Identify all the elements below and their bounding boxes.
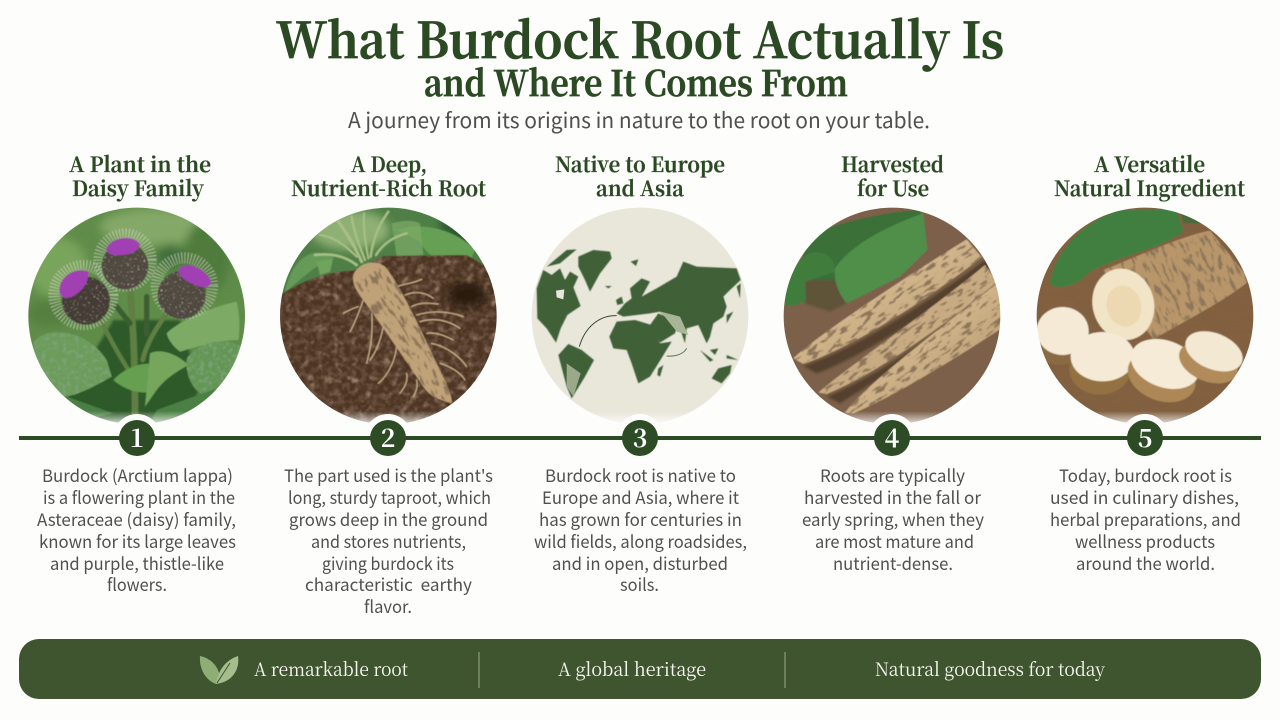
text: step 2: giving burdock its <box>322 550 454 575</box>
text: step 2: grows deep in the ground <box>289 506 488 531</box>
image: harvested roots <box>784 208 1000 423</box>
text: step 1: flowers. <box>107 571 167 596</box>
heading 1 <box>69 149 211 203</box>
heading 4 <box>841 149 944 203</box>
text: step 3: wild fields, along roadsides, <box>534 528 747 553</box>
sub heading: and Where It Comes From <box>424 57 848 107</box>
circle bottom fades <box>20 411 1260 462</box>
stems <box>100 283 168 413</box>
badge 1 <box>119 419 155 456</box>
text: step 1 <box>37 462 236 596</box>
rootlets <box>343 279 467 397</box>
banner text 3: Natural goodness for today <box>875 656 1106 682</box>
text: step 3: has grown for centuries in <box>539 506 742 531</box>
badge 5: 5 <box>1138 419 1152 455</box>
dark undergrowth <box>67 320 200 423</box>
root <box>352 262 453 404</box>
stems <box>315 212 407 265</box>
text: step 1: is a flowering plant in the <box>43 484 235 509</box>
heading 2: A Deep, <box>351 149 427 179</box>
heading 5: A Versatile <box>1094 149 1205 179</box>
title <box>276 3 1004 135</box>
text: step 4 <box>802 462 984 575</box>
text: step 4: harvested in the fall or <box>804 484 981 509</box>
image: world map <box>530 207 750 423</box>
text: step 1: and purple, thistle-like <box>50 550 224 575</box>
root cylinder <box>1104 230 1248 339</box>
text: step 5 <box>1050 462 1241 575</box>
heading 3 <box>555 149 725 203</box>
badge 1: 1 <box>130 419 144 455</box>
map highlights <box>567 363 581 397</box>
heading 4: Harvested <box>841 149 944 179</box>
heading 3: and Asia <box>596 173 685 203</box>
heading 3: Native to Europe <box>555 149 725 179</box>
text: step 2: The part used is the plant's <box>284 462 493 487</box>
text: step 3: Burdock root is native to <box>545 462 736 487</box>
image: taproot in soil <box>280 208 497 423</box>
banner text 2: A global heritage <box>558 656 706 682</box>
heading 1: Daisy Family <box>72 173 205 203</box>
leaves <box>33 332 112 397</box>
banner text 1: A remarkable root <box>254 656 408 682</box>
image: sliced root <box>1036 208 1254 423</box>
badge 4: 4 <box>885 419 900 455</box>
text: step 3 <box>534 462 747 596</box>
text: step 1: Asteraceae (daisy) family, <box>37 506 236 531</box>
root shadows <box>803 260 1003 403</box>
leaf <box>782 208 843 277</box>
badge 3: 3 <box>633 419 647 455</box>
text: step 4: early spring, when they <box>802 506 984 531</box>
text: step 2: long, sturdy taproot, which <box>288 484 491 509</box>
leaf <box>1050 209 1183 287</box>
badge 2 <box>370 419 406 456</box>
text: step 5: around the world. <box>1076 550 1215 575</box>
tagline: A journey from its origins in nature to the root on your table. <box>348 104 930 135</box>
heading 4: for Use <box>857 173 929 203</box>
cut face <box>1092 268 1155 341</box>
text: step 5: used in culinary dishes, <box>1050 484 1239 509</box>
text: step 4: are most mature and <box>815 528 974 553</box>
text: step 1: known for its large leaves <box>39 528 236 553</box>
text: step 5: Today, burdock root is <box>1059 462 1232 487</box>
continents <box>537 249 741 398</box>
text: step 2 <box>284 462 493 618</box>
main heading: What Burdock Root Actually Is <box>276 3 1004 73</box>
text: step 4: Roots are typically <box>820 462 965 487</box>
text: step 3: and in open, disturbed <box>552 550 728 575</box>
text: step 5: herbal preparations, and <box>1050 506 1241 531</box>
three roots <box>793 239 1000 414</box>
heading 5: Natural Ingredient <box>1054 173 1246 203</box>
text: step 2: characteristic earthy <box>305 571 472 596</box>
badge 5 <box>1127 419 1163 456</box>
heading 2: Nutrient-Rich Root <box>291 173 487 203</box>
text: step 4: nutrient-dense. <box>833 550 953 575</box>
heading 1: A Plant in the <box>69 149 211 179</box>
text: step 2: and stores nutrients, <box>311 528 466 553</box>
badge 2: 2 <box>381 419 395 455</box>
timeline <box>19 419 1261 456</box>
icon: twin leaves <box>200 656 238 684</box>
heading 2 <box>291 149 487 203</box>
text: step 2: flavor. <box>364 593 412 618</box>
image: burdock flowers <box>27 207 247 423</box>
leaves <box>398 226 475 258</box>
text: step 1: Burdock (Arctium lappa) <box>42 462 233 487</box>
text: step 3: Europe and Asia, where it <box>542 484 740 509</box>
slices <box>1037 306 1244 403</box>
badge 4 <box>874 419 910 456</box>
badge 3 <box>622 419 658 456</box>
text: step 3: soils. <box>620 571 659 596</box>
migration arcs <box>579 316 617 347</box>
flower heads <box>54 234 212 325</box>
step headings <box>69 149 1246 203</box>
soil <box>278 255 498 423</box>
heading 5 <box>1054 149 1246 203</box>
text: step 5: wellness products <box>1075 528 1215 553</box>
footer banner <box>19 639 1261 699</box>
